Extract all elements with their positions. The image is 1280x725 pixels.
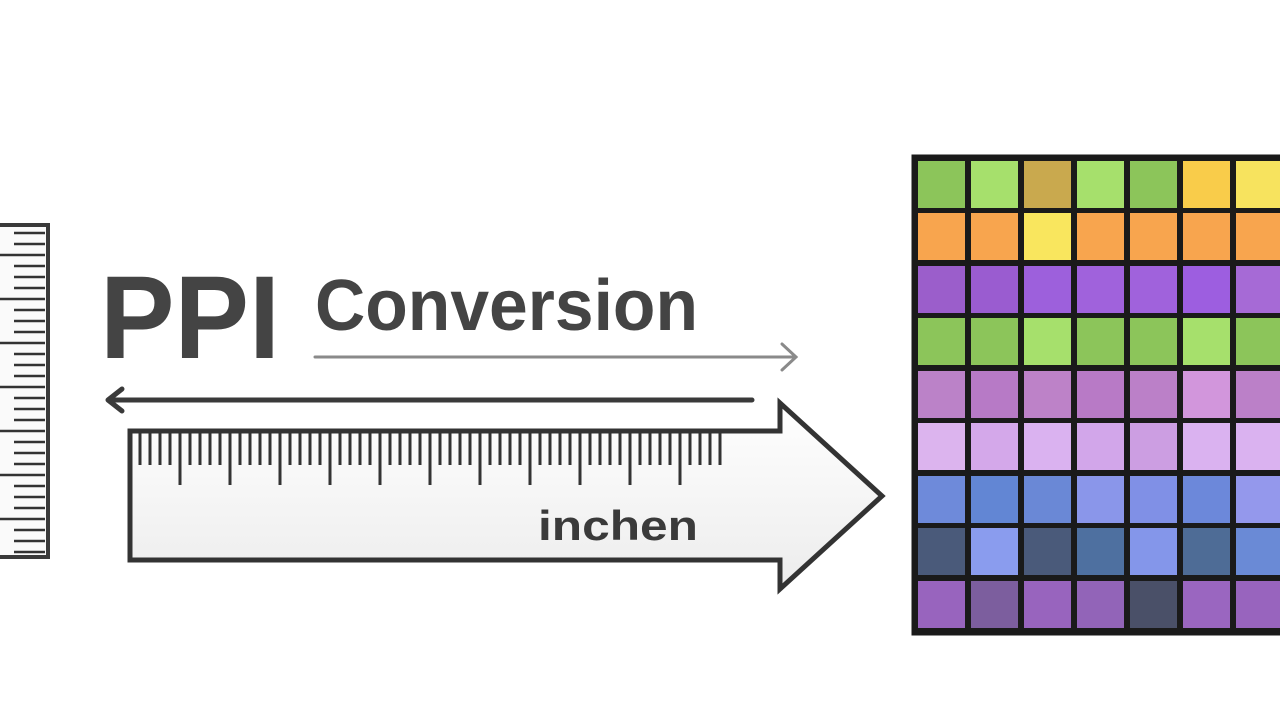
label: inchen: inchen: [538, 502, 698, 549]
title: Conversion: Conversion: [315, 266, 698, 346]
arrow: gray right: [315, 344, 796, 370]
title: PPI: PPI: [100, 252, 280, 384]
pixel grid: [914, 157, 1280, 633]
arrow: dark left: [108, 389, 752, 411]
ruler arrow: [130, 403, 882, 589]
left ruler: [0, 225, 48, 557]
